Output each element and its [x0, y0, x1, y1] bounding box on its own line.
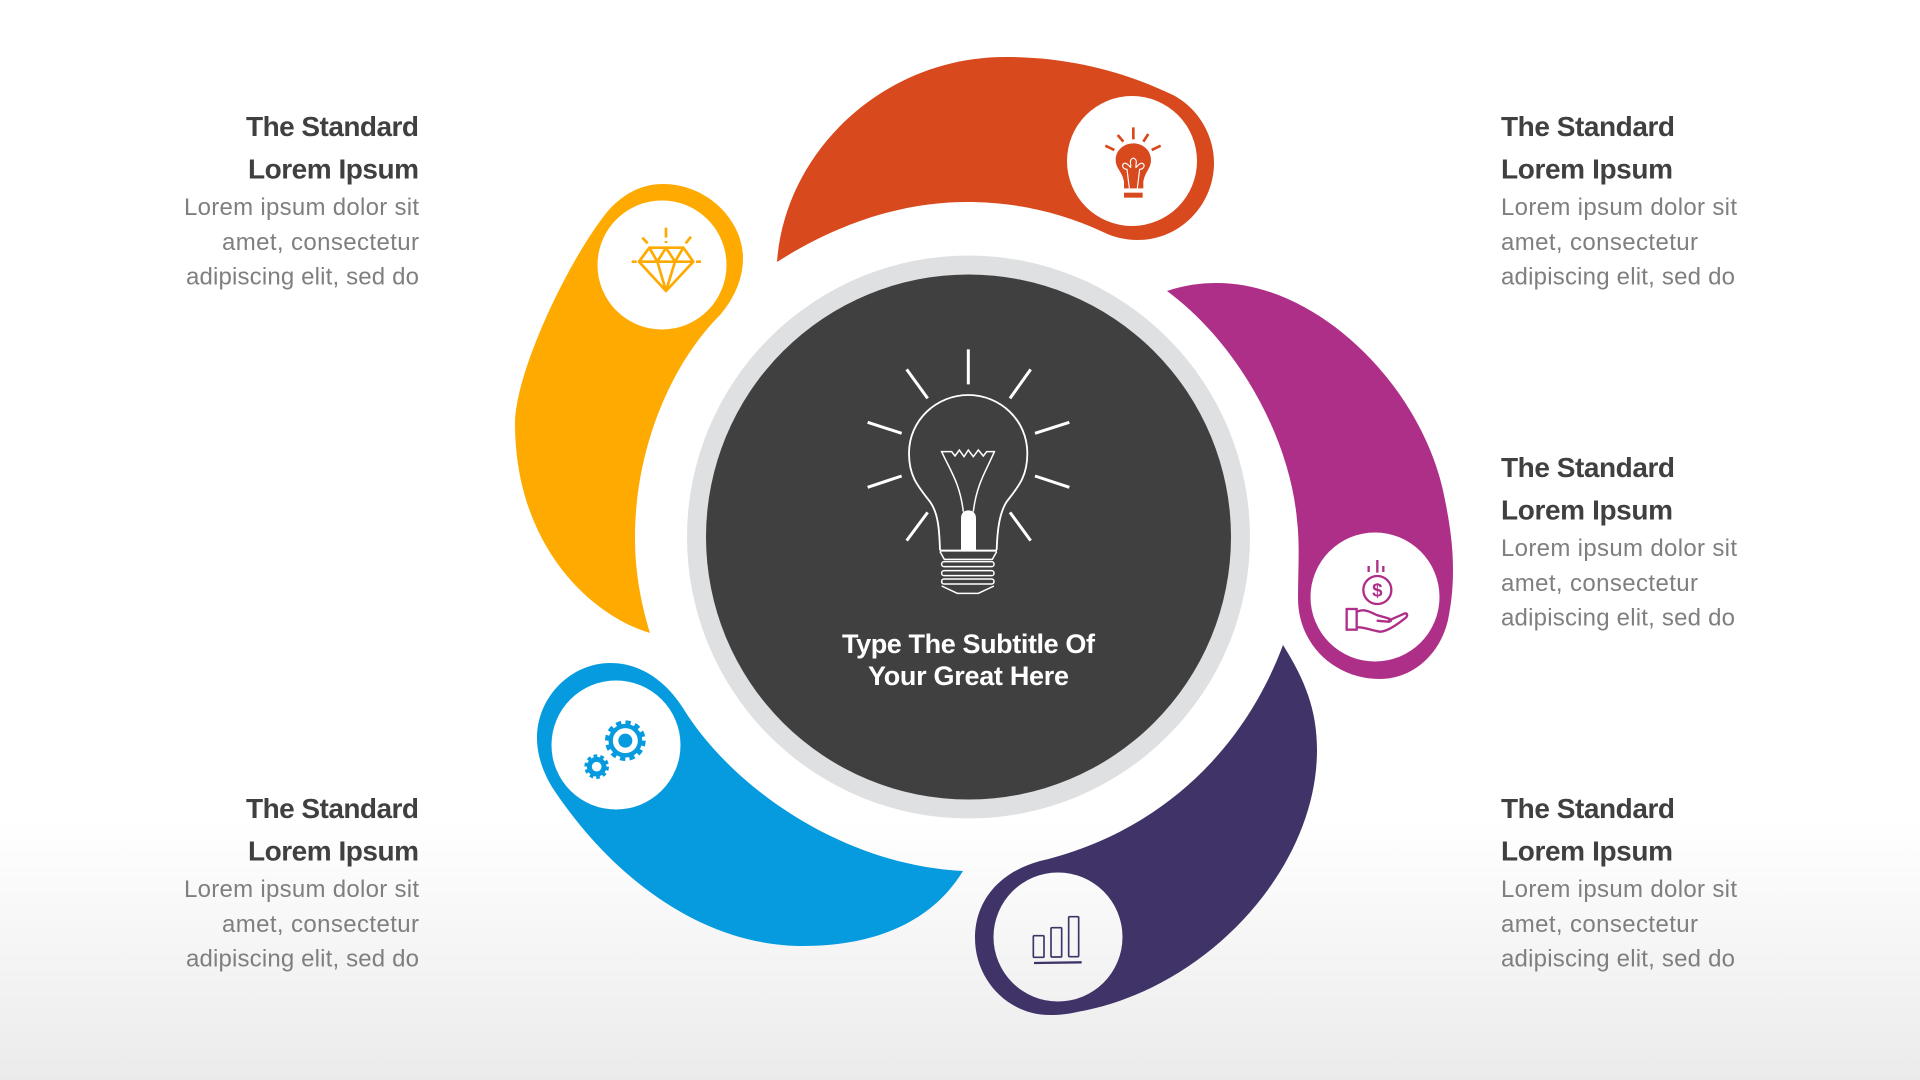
icon: bar chart — [1033, 917, 1082, 963]
text block: bottom left: Lorem ipsum dolor sit — [184, 876, 419, 903]
text block: top left: adipiscing elit, sed do — [186, 264, 419, 290]
text block: top right: Lorem ipsum dolor sit — [1501, 194, 1737, 221]
text block: top left: Lorem ipsum dolor sit — [184, 194, 419, 221]
text block: bottom right: adipiscing elit, sed do — [1501, 946, 1735, 972]
text block: top right: adipiscing elit, sed do — [1501, 264, 1735, 290]
hub subtitle: Your Great Here — [868, 661, 1069, 691]
petal: orange — [777, 57, 1214, 262]
text block: bottom right: amet, consectetur — [1501, 911, 1698, 938]
text block: bottom right: Lorem Ipsum — [1501, 836, 1673, 866]
text block: middle right: adipiscing elit, sed do — [1501, 604, 1735, 632]
text block: middle right: The Standard — [1501, 452, 1675, 483]
icon: hand with coin — [1347, 560, 1407, 632]
text block: bottom right: The Standard — [1501, 793, 1675, 824]
petal: blue — [537, 663, 963, 946]
icon: large light bulb — [868, 349, 1069, 593]
text block: top right: The Standard — [1501, 111, 1675, 142]
icon: gears — [586, 722, 644, 777]
text block: top left: Lorem Ipsum — [248, 154, 419, 184]
petal: magenta — [1167, 283, 1453, 679]
center hub — [687, 256, 1250, 818]
text block: middle right: Lorem Ipsum — [1501, 494, 1673, 526]
text block: top right: Lorem Ipsum — [1501, 154, 1673, 184]
text block: top right: amet, consectetur — [1501, 229, 1698, 256]
text block: top left: amet, consectetur — [222, 229, 419, 256]
text block: bottom right: Lorem ipsum dolor sit — [1501, 876, 1737, 903]
icon: diamond — [632, 228, 701, 291]
hub subtitle — [842, 629, 1096, 691]
hub subtitle: Type The Subtitle Of — [842, 629, 1096, 659]
text block: bottom right — [1501, 793, 1737, 972]
text block: bottom left: The Standard — [246, 793, 419, 824]
petal: yellow — [515, 184, 743, 633]
text block: bottom left: amet, consectetur — [222, 911, 419, 938]
text block: bottom left: adipiscing elit, sed do — [186, 946, 419, 972]
icon: filled light bulb — [1105, 127, 1161, 198]
hub outer ring — [687, 256, 1250, 818]
text block: top right — [1501, 111, 1737, 290]
text block: middle right — [1501, 452, 1737, 632]
text block: top left: The Standard — [246, 111, 419, 142]
hub dark disc — [706, 274, 1231, 800]
text block: middle right: amet, consectetur — [1501, 570, 1698, 597]
text block: bottom left — [184, 793, 419, 972]
icon: hand with coin: $ — [1372, 580, 1383, 601]
text block: bottom left: Lorem Ipsum — [248, 836, 419, 866]
text block: middle right: Lorem ipsum dolor sit — [1501, 535, 1737, 562]
petal: purple — [975, 645, 1317, 1015]
text block: top left — [184, 111, 419, 290]
